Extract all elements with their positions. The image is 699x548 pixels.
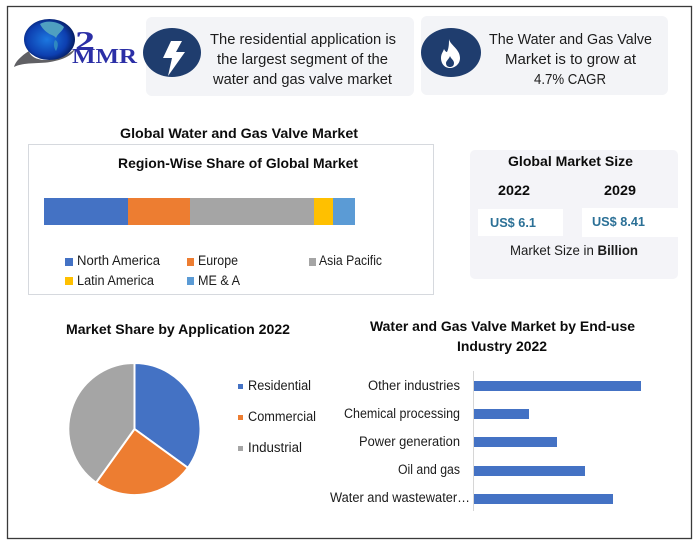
value box 2029: US$ 8.41 (592, 214, 645, 229)
legend: application: Residential (248, 378, 311, 393)
pie chart: application share (68, 363, 201, 495)
panel: CAGR callout (421, 16, 668, 95)
value box 2022: US$ 6.1 (490, 215, 536, 230)
callout text: residential (210, 32, 396, 88)
legend: regions: Europe (198, 253, 238, 268)
legend: application (238, 378, 316, 455)
panel: residential application callout (143, 17, 414, 96)
year label 2029: 2029 (604, 182, 636, 198)
market size unit note: Market Size in Billion (510, 242, 638, 258)
legend: regions: Asia Pacific (319, 253, 382, 268)
legend: regions: Latin America (77, 273, 154, 288)
panel: region-wise share (28, 144, 434, 294)
bar chart: end-use industry: Water and wastewater… (330, 490, 470, 505)
bar chart: end-use industry: Chemical processing (344, 406, 460, 421)
icon: lightning bolt (143, 28, 201, 77)
legend: regions: North America (77, 253, 160, 268)
bar chart: end-use industry: Oil and gas (398, 462, 460, 477)
heading: end-use industry (370, 318, 635, 354)
heading: end-use industry: Water and Gas Valve Market by End-use (370, 318, 635, 334)
value box 2022 (478, 209, 563, 236)
callout text: CAGR: The Water and Gas Valve (489, 32, 652, 48)
legend: application: Industrial (248, 440, 302, 455)
bar chart: end-use industry: Power generation (359, 434, 460, 449)
stacked bar chart (44, 198, 355, 225)
chart title: region-wise: Region-Wise Share of Global Market (118, 155, 358, 171)
icon: gas flame (421, 28, 481, 77)
logo: MMR globe (14, 19, 138, 68)
logo: MMR globe: MMR (72, 44, 138, 68)
logo: MMR globe: 2 (75, 26, 95, 56)
legend: regions (65, 253, 382, 288)
market size heading: Global Market Size (508, 153, 633, 169)
value box 2029 (582, 208, 679, 237)
panel: global market size (470, 150, 679, 279)
callout text: residential: water and gas valve market (212, 72, 392, 88)
legend: application: Commercial (248, 409, 316, 424)
year label 2022: 2022 (498, 182, 530, 198)
callout text: residential: The residential application is (210, 32, 396, 48)
callout text: CAGR: Market is to grow at (505, 52, 636, 68)
heading: global market: Global Water and Gas Valve Market (120, 125, 358, 141)
heading: end-use industry: Industry 2022 (457, 338, 547, 354)
bar chart: end-use industry (330, 371, 641, 511)
heading: market share by application: Market Share by Application 2022 (66, 321, 290, 337)
bar chart: end-use industry: Other industries (368, 378, 460, 393)
legend: regions: ME & A (198, 273, 240, 288)
callout text: CAGR (489, 32, 652, 88)
callout text: CAGR: 4.7% CAGR (534, 71, 606, 88)
callout text: residential: the largest segment of the (217, 52, 388, 68)
